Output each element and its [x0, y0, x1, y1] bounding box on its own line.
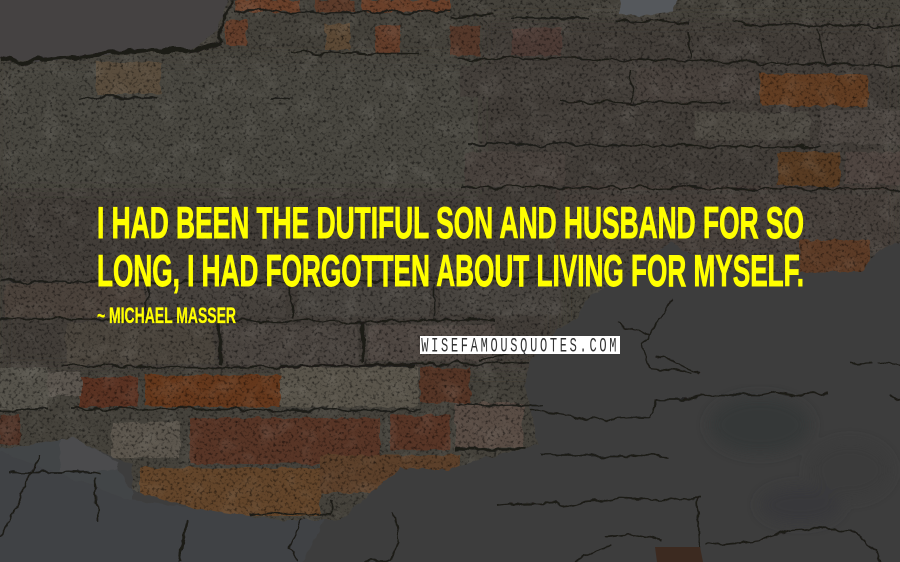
- watermark badge: WISEFAMOUSQUOTES.COM: [421, 335, 619, 358]
- quote text: [97, 199, 804, 296]
- lighter bricks: [0, 65, 900, 458]
- attribution: ~ MICHAEL MASSER: [97, 303, 236, 328]
- exposed brick patch at the bottom edge: [655, 547, 703, 562]
- plaster stains: [710, 397, 890, 523]
- mortar wall tones: [0, 20, 900, 370]
